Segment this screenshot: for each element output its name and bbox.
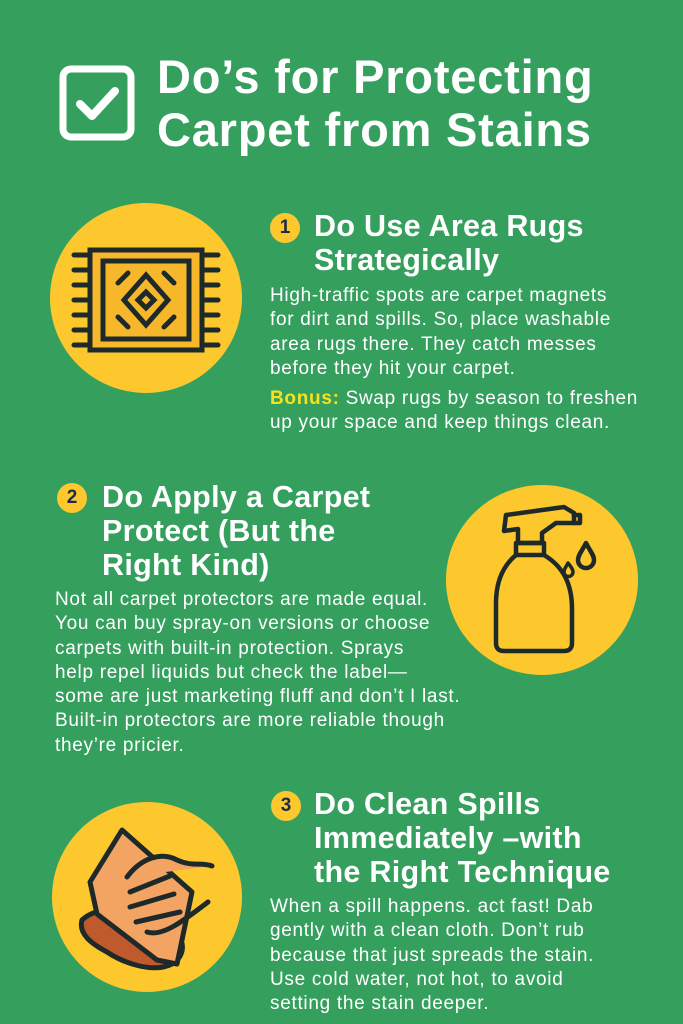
badge 3 — [271, 791, 301, 821]
body 2: they’re pricier. — [55, 735, 184, 756]
body 2 — [55, 589, 460, 756]
title: Carpet from Stains — [157, 103, 592, 156]
heading 2: Do Apply a Carpet — [102, 480, 370, 514]
heading 1 — [314, 209, 584, 277]
heading 3: Do Clean Spills — [314, 787, 541, 821]
body 1: before they hit your carpet. — [270, 358, 516, 379]
badge 2: 2 — [67, 487, 77, 508]
title: Do’s for Protecting — [157, 50, 593, 103]
body 3: because that just spreads the stain. — [270, 945, 594, 966]
badge 1: 1 — [280, 217, 290, 238]
badge 2 — [57, 483, 87, 513]
body 3: When a spill happens. act fast! Dab — [270, 896, 593, 917]
body 1: High-traffic spots are carpet magnets — [270, 285, 607, 306]
icon: spray bottle — [446, 485, 638, 675]
heading 1: Strategically — [314, 243, 499, 277]
heading 3: the Right Technique — [314, 855, 611, 889]
body 1: Bonus: Swap rugs by season to freshen — [270, 388, 638, 409]
heading 1: Do Use Area Rugs — [314, 209, 584, 243]
body 2: carpets with built-in protection. Sprays — [55, 638, 404, 659]
body 2: some are just marketing fluff and don’t I last. — [55, 686, 460, 707]
body 2: help repel liquids but check the label— — [55, 662, 408, 683]
body 1: area rugs there. They catch messes — [270, 334, 597, 355]
icon: hand with cloth — [52, 802, 242, 992]
icon: checkbox — [60, 66, 134, 140]
body 1: up your space and keep things clean. — [270, 412, 610, 433]
body 3: Use cold water, not hot, to avoid — [270, 969, 563, 990]
heading 3: Immediately –with — [314, 821, 582, 855]
badge 1 — [270, 213, 300, 243]
body 2: Not all carpet protectors are made equal. — [55, 589, 428, 610]
title — [157, 50, 593, 156]
body 2: You can buy spray-on versions or choose — [55, 613, 430, 634]
heading 2: Protect (But the — [102, 514, 336, 548]
heading 2 — [102, 480, 370, 582]
heading 3 — [314, 787, 611, 889]
icon: rug — [50, 203, 242, 393]
body 3: gently with a clean cloth. Don’t rub — [270, 920, 585, 941]
body 3: setting the stain deeper. — [270, 993, 489, 1014]
body 1: for dirt and spills. So, place washable — [270, 309, 611, 330]
heading 2: Right Kind) — [102, 548, 270, 582]
body 2: Built-in protectors are more reliable though — [55, 710, 445, 731]
body 3 — [270, 896, 594, 1014]
badge 3: 3 — [281, 795, 291, 816]
body 1 — [270, 285, 638, 433]
